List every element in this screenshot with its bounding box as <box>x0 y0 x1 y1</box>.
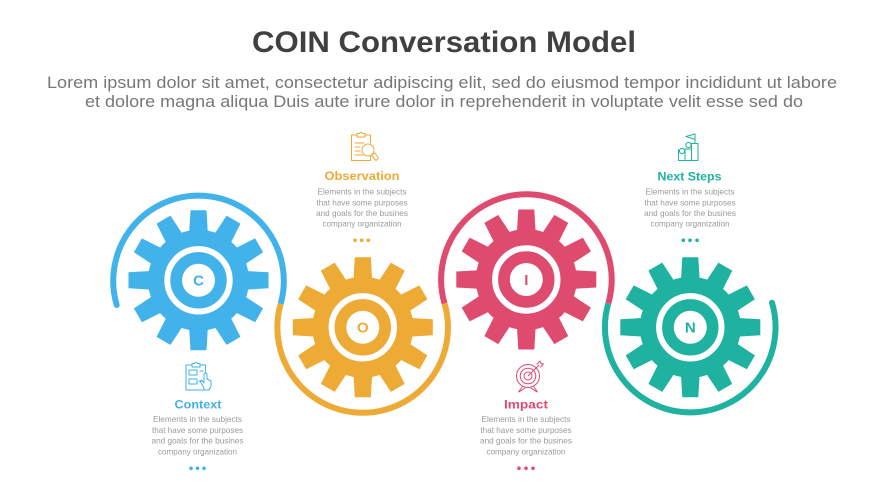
description: and goals for the busines <box>644 209 736 218</box>
description: Elements in the subjects <box>646 188 734 196</box>
heading: Context <box>174 399 222 411</box>
description: that have some purposes <box>480 426 572 435</box>
description: that have some purposes <box>316 198 408 207</box>
icon: clipboard with magnifier <box>352 132 378 160</box>
heading: Observation <box>324 171 400 183</box>
subtitle text <box>47 73 837 111</box>
dots <box>353 238 370 242</box>
icon: target with arrow <box>516 361 544 392</box>
description: company organization <box>486 447 566 456</box>
description <box>316 188 408 229</box>
description: company organization <box>158 447 237 456</box>
heading: Impact <box>504 399 548 411</box>
description: company organization <box>650 220 730 229</box>
gear I: impact <box>441 194 612 350</box>
gear N: next steps: N <box>685 320 696 337</box>
description: company organization <box>322 220 402 229</box>
description <box>644 188 736 229</box>
panel: context <box>152 362 244 470</box>
description: Elements in the subjects <box>318 188 406 196</box>
description: that have some purposes <box>644 198 736 207</box>
gear C: context: C <box>193 273 204 290</box>
gear C: context <box>113 196 284 350</box>
description: Elements in the subjects <box>153 415 242 424</box>
description: and goals for the busines <box>316 209 408 218</box>
dots <box>682 238 699 242</box>
panel: next steps <box>644 134 736 242</box>
heading: Next Steps <box>658 171 722 183</box>
gear N: next steps <box>605 257 776 412</box>
description <box>480 415 572 456</box>
dots <box>517 466 535 470</box>
gear O: observation: O <box>357 320 369 337</box>
title: COIN Conversation Model <box>252 26 636 59</box>
gear O: observation <box>277 257 448 413</box>
gear I: impact: I <box>524 272 528 289</box>
icon: clipboard with hand <box>186 362 211 390</box>
subtitle text: et dolore magna aliqua Duis aute irure dolor in reprehenderit in voluptate velit esse sed do <box>85 92 803 111</box>
description: Elements in the subjects <box>482 415 570 424</box>
description: and goals for the busines <box>152 437 244 446</box>
dots <box>189 466 206 470</box>
icon: bars with flag <box>678 134 698 160</box>
description <box>152 415 244 456</box>
panel: observation <box>316 132 408 242</box>
panel: impact <box>480 361 572 470</box>
description: and goals for the busines <box>480 437 572 446</box>
description: that have some purposes <box>152 426 243 435</box>
subtitle text: Lorem ipsum dolor sit amet, consectetur adipiscing elit, sed do eiusmod tempor incididunt ut labore <box>47 73 837 92</box>
